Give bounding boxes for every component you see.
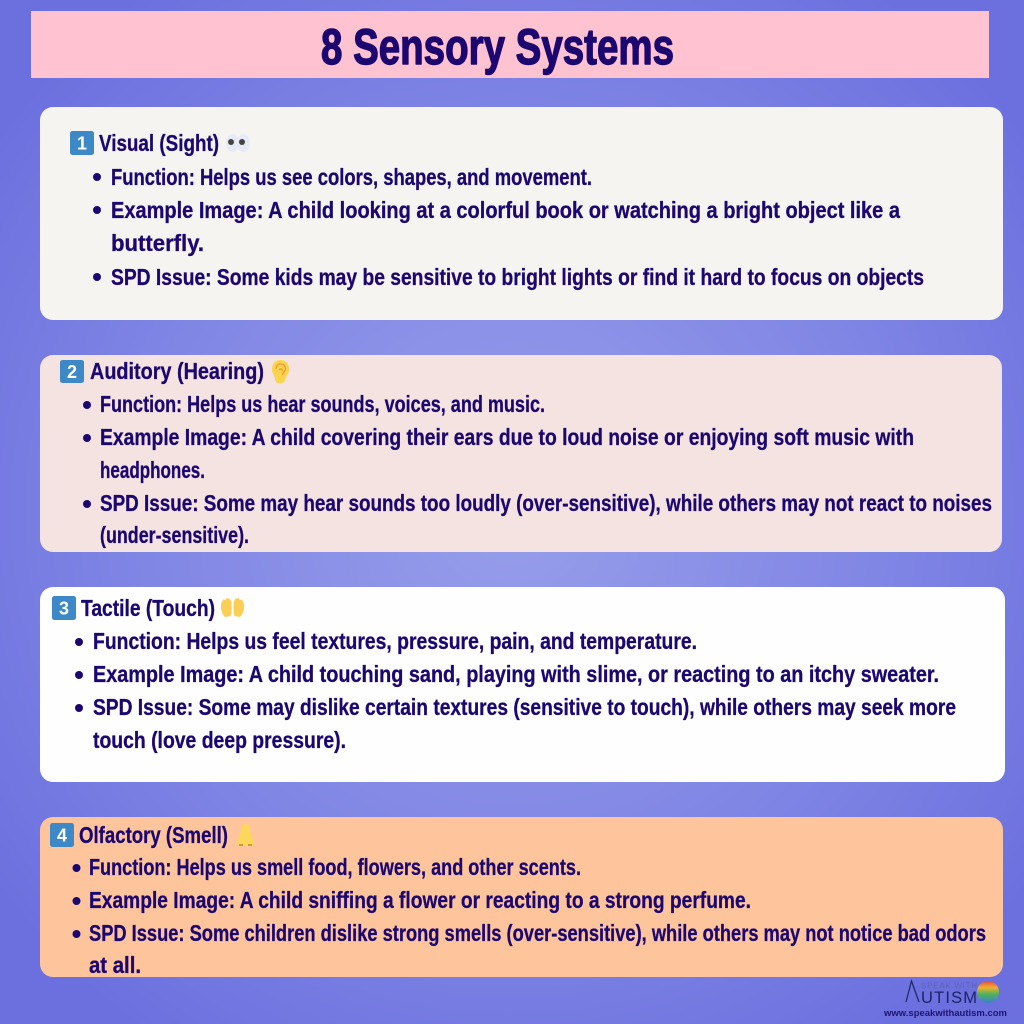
heading: olfactory: 4 — [57, 826, 67, 846]
bullet list: visual: butterfly. — [111, 230, 204, 256]
logo: speak with autism: SPEAK WITH — [921, 982, 977, 990]
bullet list: olfactory: Example Image: A child sniffing a flower or reacting to a strong perfume. — [89, 887, 751, 913]
logo: speak with autism: www.speakwithautism.com — [883, 1008, 1007, 1019]
bullet list: tactile — [75, 628, 956, 753]
heading: tactile: Tactile (Touch) — [81, 595, 215, 621]
logo: speak with autism: UTISM — [921, 989, 977, 1007]
heading: visual: Visual (Sight) — [99, 130, 219, 156]
bullet list: visual — [93, 164, 924, 290]
heading: tactile: 3 — [59, 598, 69, 618]
heading: visual: 1 — [77, 134, 87, 154]
heading: visual — [70, 130, 219, 156]
panel: olfactory — [40, 817, 1003, 978]
panel: tactile — [40, 587, 1005, 782]
bullet list: olfactory: at all. — [89, 952, 141, 978]
heading: olfactory — [50, 822, 228, 848]
title banner — [31, 11, 989, 78]
title banner: 8 Sensory Systems — [321, 19, 674, 75]
bullet list: olfactory: Function: Helps us smell food, flowers, and other scents. — [89, 854, 581, 880]
bullet list: auditory — [83, 391, 992, 548]
bullet list: olfactory — [72, 854, 986, 978]
bullet list: tactile: touch (love deep pressure). — [93, 727, 346, 753]
panel: visual — [40, 107, 1003, 320]
panel: auditory — [40, 355, 1002, 552]
bullet list: auditory: (under-sensitive). — [100, 522, 249, 548]
icon: nose — [237, 824, 254, 846]
bullet list: tactile: Function: Helps us feel textures, pressure, pain, and temperature. — [93, 628, 697, 654]
icon: ear — [272, 360, 289, 384]
heading: auditory: 2 — [67, 362, 77, 382]
bullet list: visual: Function: Helps us see colors, shapes, and movement. — [111, 164, 592, 190]
bullet list: auditory: headphones. — [100, 457, 205, 483]
icon: open hands — [221, 598, 244, 617]
bullet list: visual: Example Image: A child looking at a colorful book or watching a bright object like a — [111, 197, 900, 223]
icon: eyes — [226, 134, 250, 152]
heading: auditory: Auditory (Hearing) — [90, 358, 264, 384]
heading: olfactory: Olfactory (Smell) — [79, 822, 228, 848]
bullet list: auditory: Function: Helps us hear sounds, voices, and music. — [100, 391, 545, 417]
logo: speak with autism — [883, 981, 1007, 1019]
